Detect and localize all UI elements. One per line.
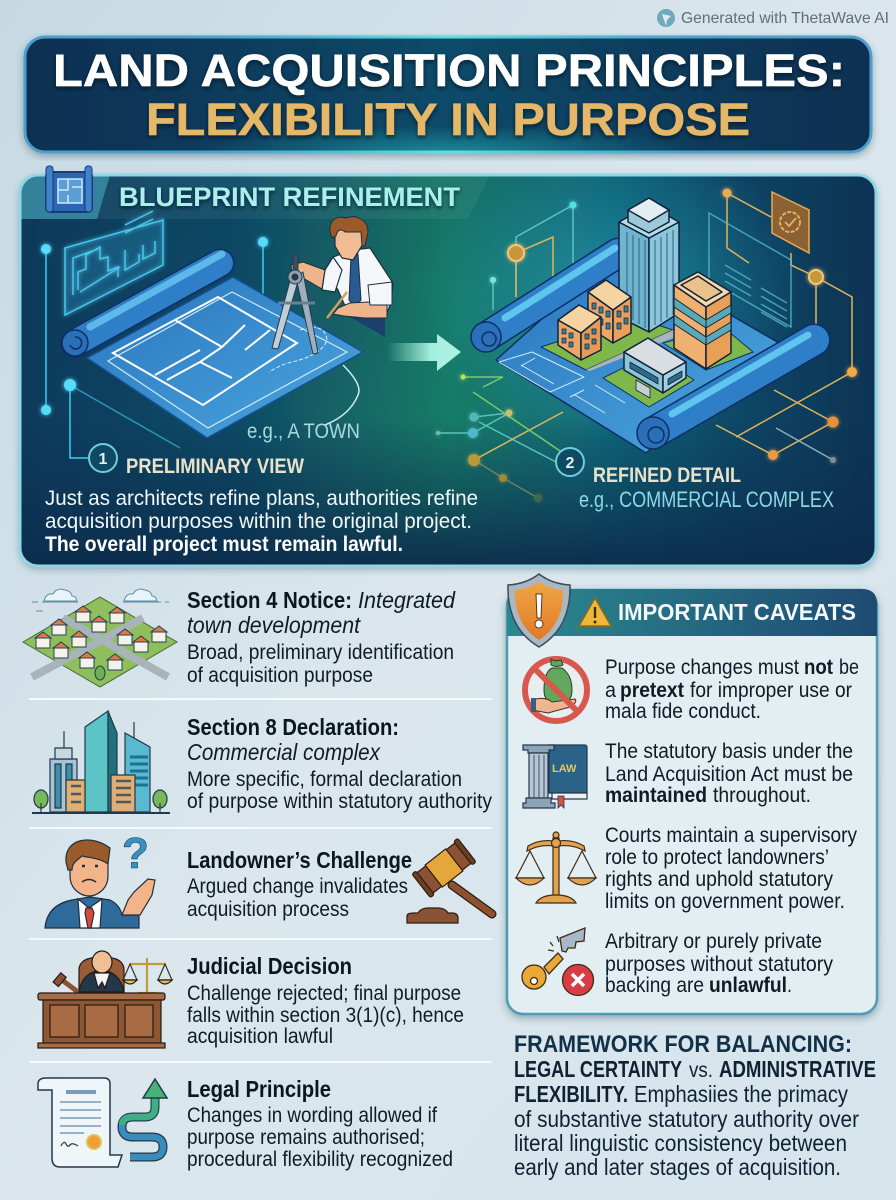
text block: framework for balancing: LEGAL CERTAINTY (514, 1056, 682, 1082)
icon: blueprint roll (46, 166, 92, 212)
panel: important caveats (507, 574, 877, 1014)
text: caveat 2: The statutory basis under the (605, 740, 853, 763)
text: section 4: of acquisition purpose (187, 664, 373, 687)
step 1 label: e.g., A TOWN (247, 420, 360, 443)
text: judicial decision (187, 953, 464, 1048)
step 1 label (89, 420, 360, 478)
icon: warning shield (508, 574, 570, 647)
roll (75, 263, 220, 343)
text: caveat 4: . (787, 974, 792, 997)
text: section 8 (187, 714, 492, 813)
blueprint explanation text (45, 487, 478, 556)
illustration: refined blueprint with buildings (471, 198, 814, 453)
text: section 4: Integrated (358, 587, 456, 613)
icon: document and winding arrow (38, 1078, 167, 1167)
text: judicial decision: Judicial Decision (187, 953, 352, 979)
step 2 label (556, 448, 834, 512)
icon: question mark: ? (122, 829, 149, 878)
back orange building (588, 280, 631, 343)
blueprint explanation text: acquisition purposes within the original project. (45, 510, 472, 533)
text: caveat 1 (605, 656, 859, 723)
heading: blueprint refinement: BLUEPRINT REFINEMENT (119, 182, 461, 212)
text: landowner's challenge (187, 847, 412, 921)
blueprint explanation text: The overall project must remain lawful. (45, 533, 403, 556)
floating schematic (65, 211, 163, 315)
illustration: preliminary blueprint (41, 211, 363, 458)
text: legal principle: purpose remains authorised; (187, 1126, 425, 1149)
circuit lines right side (437, 193, 852, 498)
caveat 1 (525, 656, 859, 723)
icon: confused landowner (45, 840, 155, 928)
caveat 2 (523, 740, 853, 808)
text: caveat 3: rights and uphold statutory (605, 868, 833, 891)
list row: judicial decision (38, 951, 464, 1048)
illustration: architect with compass (272, 217, 393, 354)
text: caveat 1: not (804, 656, 833, 679)
text: section 4 (187, 587, 456, 687)
caveat 3 (516, 824, 857, 913)
text block: framework for balancing: of substantive statutory authority over (514, 1106, 859, 1132)
blueprint explanation text: Just as architects refine plans, authorities refine (45, 487, 478, 510)
title line 2: FLEXIBILITY IN PURPOSE (146, 94, 750, 145)
heading: important caveats: IMPORTANT CAVEATS (618, 599, 856, 625)
text: landowner's challenge: Landowner’s Challenge (187, 847, 412, 873)
text: section 4: Broad, preliminary identification (187, 641, 454, 664)
text: section 8: More specific, formal declaration (187, 768, 462, 791)
text: caveat 2: maintained (605, 784, 707, 807)
text: judicial decision: acquisition lawful (187, 1025, 333, 1048)
text: caveat 3 (605, 824, 857, 913)
icon: law book and column: LAW (552, 763, 577, 775)
list row: landowner's challenge (45, 829, 492, 928)
text block: framework for balancing: early and later stages of acquisition. (514, 1154, 841, 1180)
tower (619, 198, 679, 332)
text block: framework for balancing: vs. (689, 1059, 713, 1082)
text: caveat 4: unlawful (709, 974, 787, 997)
circuit lines (46, 242, 359, 458)
text: caveat 4: backing are (605, 974, 704, 997)
text: caveat 1: Purpose changes must (605, 656, 799, 679)
text block: framework for balancing: Emphasiies the primacy (634, 1081, 848, 1107)
caveat 4 (522, 928, 833, 997)
step 2 label: 2 (566, 455, 575, 472)
text: caveat 2: throughout. (713, 784, 811, 807)
text block: framework for balancing: FRAMEWORK FOR BALANCING: (514, 1031, 852, 1058)
text: caveat 2 (605, 740, 853, 807)
sheet (87, 277, 363, 438)
arrow: refinement direction (387, 334, 461, 371)
list row: legal principle (38, 1076, 453, 1171)
icon: broken key (522, 928, 594, 996)
front roll (653, 340, 814, 433)
text: caveat 1: mala fide conduct. (605, 700, 761, 723)
icon: judge at bench (38, 951, 172, 1048)
grounds (541, 317, 673, 370)
text: caveat 3: role to protect landowners’ (605, 846, 829, 869)
text: legal principle: Legal Principle (187, 1076, 331, 1102)
step 1 label: PRELIMINARY VIEW (126, 455, 304, 478)
text block: framework for balancing: literal linguistic consistency between (514, 1130, 847, 1156)
text: caveat 4 (605, 930, 833, 997)
text: landowner's challenge: Argued change invalidates (187, 875, 408, 898)
text block: framework for balancing: FLEXIBILITY. (514, 1081, 628, 1107)
icon: no money bag (525, 659, 587, 721)
text: caveat 3: Courts maintain a supervisory (605, 824, 857, 847)
text: caveat 4: purposes without statutory (605, 953, 833, 976)
text: caveat 1: pretext (620, 679, 684, 702)
text: caveat 1: for improper use or (690, 679, 852, 702)
watermark: Generated with ThetaWave AI (681, 10, 889, 27)
front orange building (558, 305, 601, 360)
text block: framework for balancing (514, 1031, 876, 1180)
compass (272, 254, 318, 354)
striped tower (674, 272, 731, 369)
text: section 8: Commercial complex (187, 739, 381, 765)
text: caveat 1: a (605, 679, 616, 702)
step 1 label: 1 (99, 451, 108, 468)
text: caveat 3: limits on government power. (605, 890, 845, 913)
text: section 4: town development (187, 612, 361, 638)
icon: gavel (407, 838, 492, 923)
text: section 4: Section 4 Notice: (187, 587, 352, 613)
text: legal principle: Changes in wording allowed if (187, 1104, 437, 1127)
icon: balance scales (516, 832, 596, 903)
panel: blueprint refinement (20, 140, 876, 566)
text: landowner's challenge: acquisition process (187, 898, 349, 921)
list row: section 4 notice (23, 587, 456, 687)
text: caveat 2: Land Acquisition Act must be (605, 763, 853, 786)
low building (624, 338, 686, 398)
text: section 8: Section 8 Declaration: (187, 714, 399, 740)
text: caveat 1: be (839, 656, 859, 679)
text: section 8: of purpose within statutory authority (187, 790, 492, 813)
step 2 label: e.g., COMMERCIAL COMPLEX (579, 487, 834, 512)
text: caveat 4: Arbitrary or purely private (605, 930, 822, 953)
icon: town plan (23, 589, 177, 687)
icon: warning triangle (579, 598, 611, 626)
text: judicial decision: Challenge rejected; final purpose (187, 982, 461, 1005)
text: legal principle: procedural flexibility recognized (187, 1148, 453, 1171)
step 2 label: REFINED DETAIL (593, 464, 741, 487)
title banner (25, 36, 871, 154)
title line 1: LAND ACQUISITION PRINCIPLES: (53, 45, 845, 96)
text: legal principle (187, 1076, 453, 1171)
list row: section 8 declaration (32, 711, 492, 813)
icon: law book and column (523, 745, 587, 808)
icon: commercial buildings (32, 711, 170, 813)
icon: approval badge (772, 192, 809, 253)
text: judicial decision: falls within section 3(1)(c), hence (187, 1004, 464, 1027)
